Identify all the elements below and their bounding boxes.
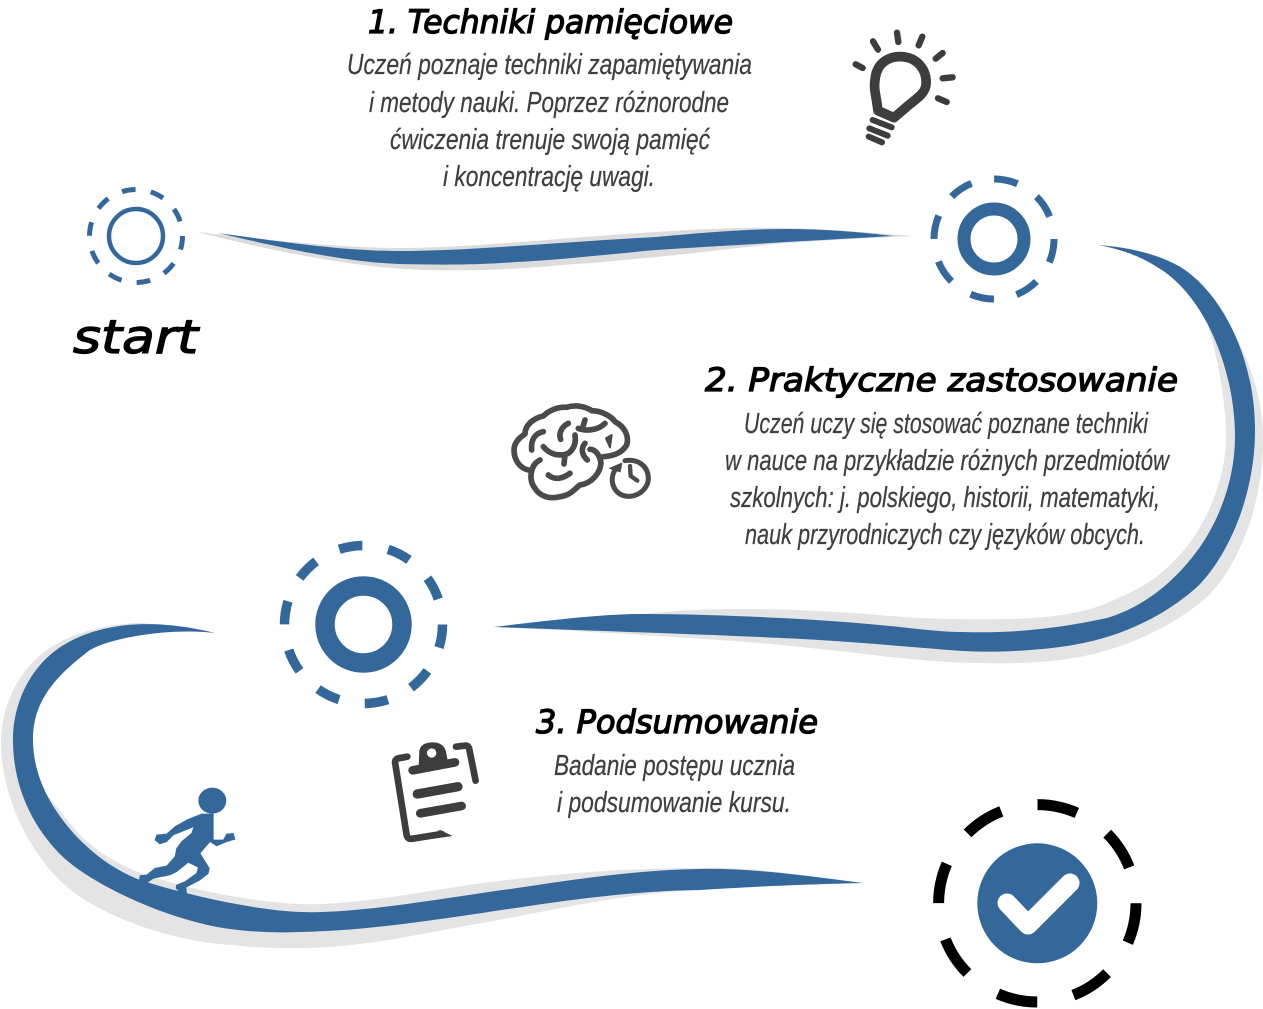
ribbon: start to step 1 xyxy=(197,228,914,270)
text block: step 1 xyxy=(347,49,752,193)
icon: light bulb xyxy=(856,33,953,142)
text block: step 3: Badanie postępu ucznia xyxy=(554,750,795,782)
step 2 marker xyxy=(284,546,442,704)
finish marker xyxy=(939,805,1136,1002)
icon: running child xyxy=(139,788,235,895)
icon: clipboard xyxy=(395,742,479,841)
text block: step 1: Uczeń poznaje techniki zapamiętywania xyxy=(347,49,752,81)
text block: step 1: i metody nauki. Poprzez różnorodne xyxy=(369,87,729,119)
text block: step 2 xyxy=(725,408,1171,551)
heading: step 2: 2. Praktyczne zastosowanie xyxy=(705,361,1178,399)
text block: step 1: ćwiczenia trenuje swoją pamięć xyxy=(390,124,710,156)
step 1 marker xyxy=(934,179,1054,299)
start marker xyxy=(90,190,182,282)
heading: step 1: 1. Techniki pamięciowe xyxy=(368,3,733,41)
text block: step 3 xyxy=(554,750,795,819)
icon: brain with clock xyxy=(514,406,648,498)
heading: step 3: 3. Podsumowanie xyxy=(536,703,818,741)
ribbon: step 2 to finish xyxy=(1,623,863,948)
start label: start xyxy=(73,310,200,364)
ribbon: step 1 to step 2 xyxy=(494,245,1263,663)
text block: step 1: i koncentrację uwagi. xyxy=(443,161,655,193)
text block: step 3: i podsumowanie kursu. xyxy=(557,787,791,819)
